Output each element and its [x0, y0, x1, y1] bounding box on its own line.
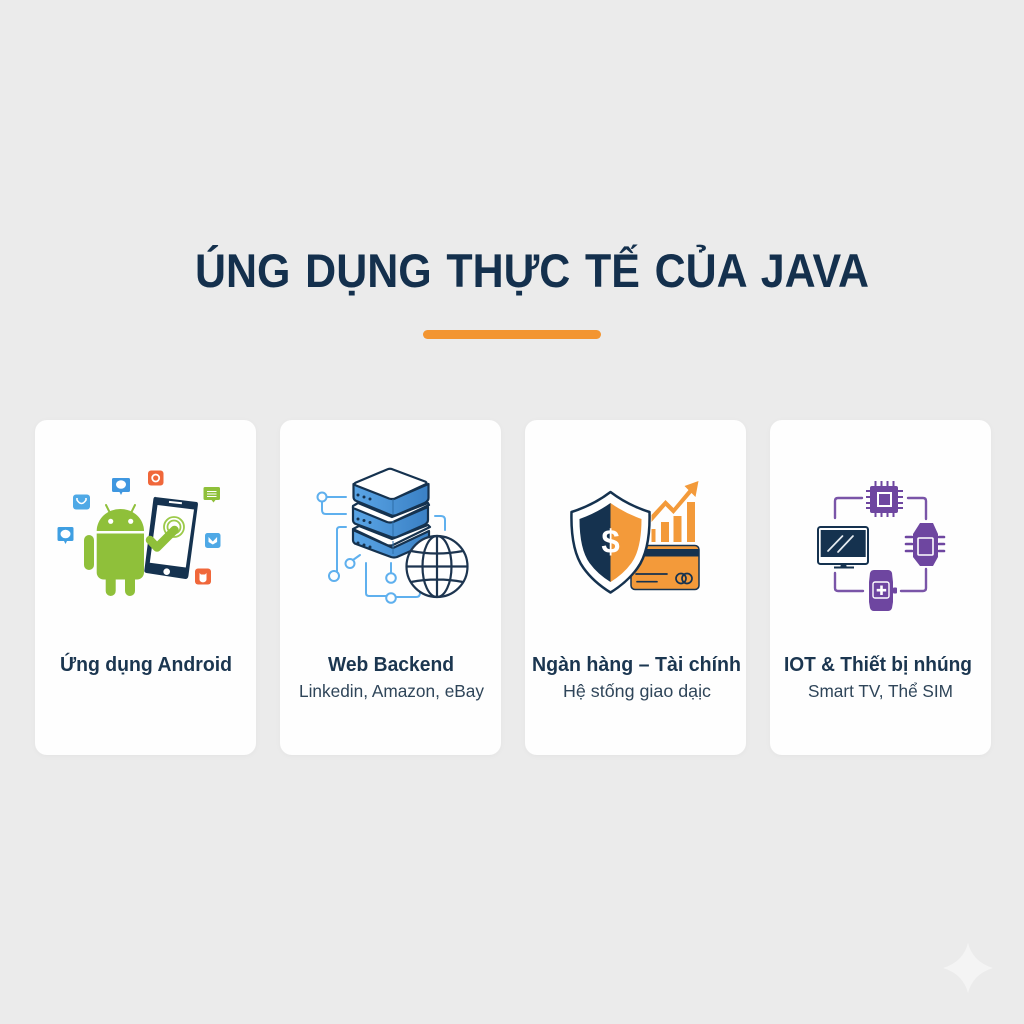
icon: connector lines — [835, 498, 926, 591]
label: Banking: Ngàn hàng – Tài chính — [532, 654, 741, 676]
icon: smartwatch with plus — [869, 570, 897, 611]
sublabel: Web Backend: Linkedin, Amazon, eBay — [299, 681, 484, 701]
panel: Web Backend — [280, 420, 501, 755]
panel: IoT — [770, 420, 991, 755]
icon: sparkle watermark — [943, 943, 993, 993]
icon: shield with dollar: $ — [601, 523, 620, 560]
icon: globe — [406, 536, 468, 597]
label: Web Backend: Web Backend — [328, 654, 454, 676]
panel: Banking — [525, 420, 746, 755]
label: Android: Ứng dụng Android — [60, 652, 232, 676]
label: IoT: IOT & Thiết bị nhúng — [784, 654, 972, 676]
icon: credit card — [631, 546, 699, 590]
panel: Android — [35, 420, 256, 755]
icon: circuit lines — [318, 492, 445, 603]
icon: shield with dollar — [571, 492, 650, 592]
icon: smartwatch with chip — [906, 523, 944, 566]
icon: chip — [866, 481, 903, 517]
icon: small app badges — [58, 470, 220, 584]
icon: growth chart — [652, 481, 698, 542]
icon: Android robot with phone — [58, 470, 220, 596]
icon: server stack — [353, 469, 430, 558]
title: ÚNG DỤNG THỰC TẾ CỦA JAVA — [195, 244, 869, 297]
icon: monitor — [818, 527, 868, 568]
title underline — [423, 330, 601, 339]
sublabel: IoT: Smart TV, Thể SIM — [808, 681, 953, 701]
sublabel: Banking: Hệ stống giao dạịc — [563, 681, 711, 701]
